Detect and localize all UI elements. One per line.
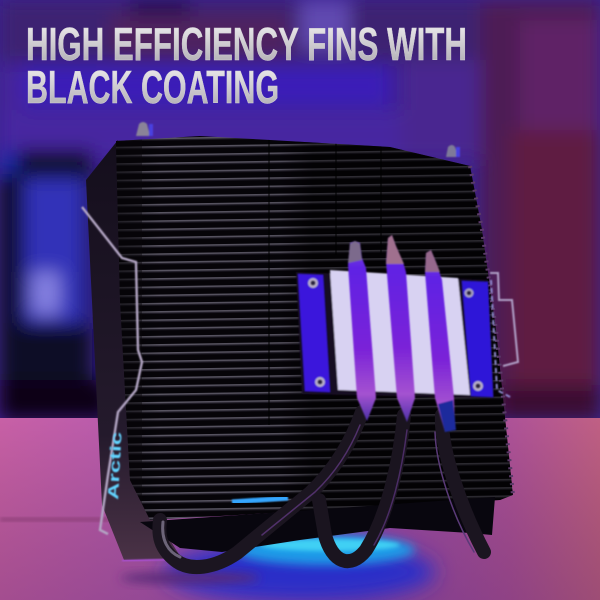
heatsink base plate [296,270,494,398]
wire retention clip left [82,207,142,534]
dark metal base frame [296,272,494,398]
wooden table surface [0,418,600,600]
screw bottom left [315,377,325,387]
glowing logo on side plate: Arctic [105,431,126,500]
lower cavity under fins [140,497,495,552]
side plate of cooler [86,140,180,561]
blue left flange [298,274,330,392]
screw top left [308,278,318,288]
heatsink fins [116,136,513,520]
title line two: BLACK COATING [26,61,279,113]
heatpipe flat left [348,241,376,421]
white contact plate [330,270,470,395]
screw bottom right [473,381,483,391]
heatpipe tubes lower [159,412,484,567]
heatpipe flat middle [386,235,415,422]
screw top right [464,288,474,298]
fin right edge highlights [470,166,513,495]
title [26,18,467,113]
wire retention clip right [490,273,518,398]
heatpipe flat right [425,250,456,432]
cooler mounting screws [136,122,460,157]
blue right flange [462,281,493,397]
